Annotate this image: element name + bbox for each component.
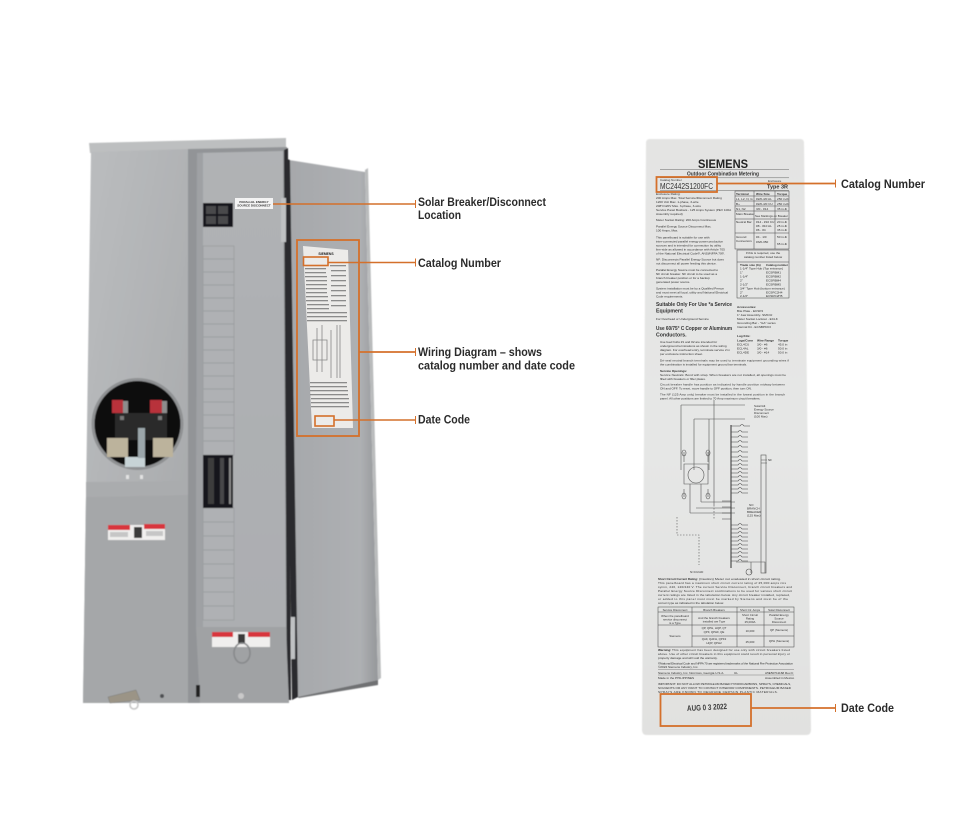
ratings text column: and must meet all local, utility and National Electrical — [656, 290, 728, 294]
label: solar breaker location: Solar Breaker/Disconnect — [418, 197, 546, 209]
footer: UL — [734, 671, 738, 675]
spec table text: L1, L2, N, G — [736, 197, 753, 201]
lower meter cover — [83, 495, 188, 703]
accessories: Torque — [778, 338, 789, 342]
socket cover dots — [126, 475, 143, 479]
breaker catalog text: 2" — [740, 290, 743, 294]
product line: Outdoor Combination Metering — [687, 172, 759, 178]
label: catalog number: Catalog Number — [418, 258, 501, 270]
breaker section inner panel — [196, 151, 286, 627]
breaker catalog text: ECSRC2H5 — [766, 294, 783, 298]
short circuit table text: Rating — [746, 616, 755, 620]
spec table text: 25 in-lb — [777, 224, 787, 228]
spec table text: #2/0-4/0 CU — [756, 202, 773, 206]
footer: A5E50711168 Rev.C — [765, 671, 794, 675]
general notes: filled with breakers or filler plates. — [660, 377, 706, 381]
warning label: meter section — [108, 524, 165, 540]
short circuit rating text: current ratings are listed in the tabulation below. Any circuit breaker installed, replaced, — [658, 593, 790, 597]
general notes: ON and OFF. To reset, move handle to OFF position, then turn ON. — [660, 386, 752, 390]
breaker catalog text: 1-1/4" — [740, 274, 748, 278]
accessories: 3/0 - #14 — [757, 350, 769, 354]
callout: catalog number box — [304, 257, 416, 266]
accessories: 1" Jaw Assembly- SMC3J — [737, 313, 773, 317]
footer: SOLVENTS OR ANY PAINT TO CONTACT INTERIOR COMPONENTS. PETROLEUM BASED — [658, 686, 792, 690]
accessories: Wire Range — [757, 338, 774, 342]
warning text: ©2022 Siemens Industry, Inc. — [658, 665, 699, 669]
ratings text column: Meter Socket Rating: 200 Amps Continuous — [656, 218, 716, 222]
short circuit table text: Solar Disconnect — [768, 608, 790, 612]
ratings text column: 1200 Volt Max. 1-phase, 3-wire — [656, 200, 699, 204]
short circuit rating text: symm, 240, 120/240 V. The current Service Disconnect, branch circuit breakers and — [658, 585, 792, 589]
footer: Siemens Industry, Inc. Norcross, Georgia U.S.A. — [658, 671, 724, 675]
top cap — [89, 138, 286, 153]
short circuit table text: Short Cir. Amps — [740, 608, 761, 612]
schematic annotations: N=CU/AD — [690, 570, 704, 574]
enlarged wiring diagram label — [642, 139, 836, 735]
ratings text column: inter-connected parallel energy power production — [656, 240, 723, 244]
short circuit table text: Service Disconnect — [663, 608, 688, 612]
accessories: Bite Plate - ECSP4 — [737, 309, 763, 313]
warning text: property damage and will void the warranty. — [658, 656, 718, 660]
spec table text: 3/0 - #14 — [756, 207, 768, 211]
warning text: ®National Electrical Code and NFPA 70 are registered trademarks of the National Fire Protection Association — [658, 662, 793, 666]
short circuit table text: installed are Type — [703, 620, 726, 624]
rules — [660, 170, 789, 190]
conductors heading — [656, 326, 732, 338]
schematic annotations: NF — [768, 458, 772, 462]
accessories: 3/0 - #6 — [757, 346, 768, 350]
short circuit table text: Siemens — [669, 634, 681, 638]
footer: IMPORTANT: DO NOT ALLOW PETROLEUM BASED HYDROCARBONS, SPRAYS, CHEMICALS, — [658, 682, 791, 686]
schematic annotations: BREAKER — [747, 510, 762, 514]
breaker catalog text — [740, 251, 789, 298]
enclosure type: Enclosure — [768, 179, 782, 183]
ratings text column: Code requirements. — [656, 294, 683, 298]
meter section cover — [83, 149, 188, 703]
general notes: Service Openings: — [660, 369, 687, 373]
ratings text column: NF circuit breaker. NF circuit to be used as a — [656, 272, 717, 276]
label: solar breaker location — [418, 197, 546, 222]
warning text: This equipment has been designed for use only with circuit breakers listed — [672, 648, 790, 652]
short circuit table text: 10,000 — [746, 629, 755, 633]
ratings text column: sources and is intended for connection by utility — [656, 244, 721, 248]
solar breaker sticker: PARALLEL ENERGY — [239, 200, 269, 204]
accessories: 45.0 in — [778, 342, 788, 346]
label: wiring diagram: catalog number and date code — [418, 360, 575, 372]
accessories: Internal Kit - ECSBPKK3 — [737, 325, 771, 329]
callout boxes and leaders: photo — [273, 200, 416, 436]
breaker catalog text: 1-1/4" Type Hub (Top entrance) — [740, 266, 783, 270]
label: date code right: Date Code — [841, 703, 894, 715]
ratings text column: Parallel Energy Source Disconnect Max. — [656, 224, 712, 228]
breaker catalog text: ECSRC2H4 — [766, 290, 783, 294]
spec table text: Ground — [736, 235, 747, 239]
schematic annotations: NO — [749, 503, 754, 507]
brand: SIEMENS — [698, 159, 748, 171]
schematic annotations: (100 Max) — [754, 414, 768, 418]
conductors heading: Conductors. — [656, 332, 687, 338]
spec table text: Wire Size — [756, 192, 770, 196]
branch breakers — [203, 455, 233, 508]
short circuit table text: Disconnect — [772, 620, 786, 624]
spec table text: Torque — [777, 192, 788, 196]
right spec table — [735, 191, 789, 249]
breaker catalog text: 2-1/2" — [740, 282, 748, 286]
short circuit table text: Parallel Energy — [769, 613, 789, 617]
meter socket ring — [92, 378, 184, 470]
label: wiring diagram — [418, 347, 575, 372]
spec table text: 250 in-lb — [777, 202, 789, 206]
ratings text column: not disconnect all power feeding this device. — [656, 262, 717, 266]
spec table text: #6 - #4 — [756, 228, 766, 232]
wiring diagram on door — [303, 246, 353, 428]
solar breaker sticker: SOURCE DISCONNECT — [237, 204, 271, 208]
ratings text column: 200 Amps Max. Total Service/Disconnect Rating — [656, 196, 722, 200]
breaker catalog text: Trade size (In) — [740, 263, 761, 267]
schematic annotations: Disconnect — [754, 411, 769, 415]
breaker catalog text: 1" — [740, 270, 743, 274]
schematic annotations: BRANCH — [747, 506, 760, 510]
spec table text: #2/0-4/0 AL — [756, 197, 772, 201]
accessories: Meter Socket Lockout - ECLK — [737, 317, 779, 321]
ratings text column: line-side as allowed in accordance with Article 705 — [656, 248, 725, 252]
short circuit table text: Source — [774, 616, 784, 620]
spec table text: N1, N2 — [736, 207, 746, 211]
schematic annotations: (125 Max) — [747, 514, 761, 518]
callout: wiring diagram box — [297, 240, 416, 436]
ratings text column: 208Y/120V Max. 3-phase, 3-wire — [656, 204, 701, 208]
spec table text: #14 - #10 CU — [756, 220, 774, 224]
catalog number value: Catalog Number — [660, 178, 682, 182]
accessories: ECL4CU — [737, 342, 749, 346]
label text content — [656, 159, 795, 713]
short circuit rating text: Parallel Energy Source Disconnect combinations to be used for various short circuit — [658, 589, 792, 593]
spec table text: 35 in-lb — [777, 207, 787, 211]
short circuit rating text: (Caution) Meter not evaluated in short circuit rating. — [699, 577, 781, 581]
general notes: per enclosure instruction sheet. — [660, 352, 703, 356]
ratings text column: of the National Electrical Code®, ANSI/NFPA 70®. — [656, 252, 725, 256]
accessories: ECL4AL — [737, 346, 749, 350]
label: solar breaker location: Location — [418, 210, 461, 222]
spec table text: B+ — [736, 202, 740, 206]
accessories: Accessories: — [737, 305, 756, 309]
general notes: Circuit breaker handle has position as indicated by handle position midway between — [660, 382, 785, 386]
ratings text column: Service Panel Busbars - 125 Amps System (PEV 100A — [656, 208, 732, 212]
solar breaker sticker — [235, 198, 273, 209]
callout: date code box — [315, 416, 416, 426]
label: catalog number right: Catalog Number — [841, 179, 925, 191]
ratings text column: System installation must be by a Qualified Person — [656, 286, 724, 290]
accessories: Grounding Bar - "GA" series — [737, 321, 776, 325]
short circuit table text: Branch Breakers — [703, 608, 725, 612]
short circuit rating text: This panelboard has a maximum short circuit current rating of 25,000 amps rms — [658, 581, 786, 585]
breaker catalog text: 2-1/2" — [740, 294, 748, 298]
spec table text: See Markings on Breaker — [755, 214, 788, 218]
schematic annotations: Solar/Alt — [754, 404, 766, 408]
warning label: breaker section — [212, 632, 270, 647]
photo: open meter panel — [83, 138, 381, 709]
conductors heading: Use 60/75° C Copper or Aluminum — [656, 326, 732, 332]
breaker catalog text: If this is required, use the — [746, 251, 781, 255]
general notes: the combination is installed for equipment ground bar terminals. — [660, 362, 747, 366]
open door — [289, 160, 378, 697]
spec table text: #3/0-350 — [756, 240, 768, 244]
schematic annotations — [690, 404, 774, 574]
breaker catalog text: 3/4" Type Hub (bottom entrance) — [740, 286, 785, 290]
label: date code: Date Code — [418, 414, 470, 426]
solar breaker — [203, 203, 233, 227]
knockout strips — [203, 246, 234, 620]
general notes: panel. All other positions are limited to 70 Amp maximum circuit breakers. — [660, 396, 761, 400]
spec table text: 250 in-lb — [777, 197, 789, 201]
accessories — [737, 305, 789, 354]
ratings text column: Parallel Energy Source must be connected to — [656, 268, 718, 272]
short circuit table text: HQP, QPH2 — [706, 641, 722, 645]
callout: solar breaker leader — [273, 200, 416, 208]
breaker catalog text: Catalog number — [766, 263, 789, 267]
latch — [108, 690, 164, 709]
label: wiring diagram: Wiring Diagram – shows — [418, 347, 542, 359]
short circuit rating text: correct type as indicated in the tabulation below. — [658, 601, 724, 605]
spec table text — [736, 192, 789, 246]
spec table text: #8 - #10 AL — [756, 224, 772, 228]
accessories: Lug Kits: — [737, 334, 750, 338]
short circuit table text — [661, 608, 790, 645]
accessories: 50.0 in — [778, 350, 788, 354]
short circuit table text: QPH (Siemens) — [769, 639, 789, 643]
short circuit table — [658, 607, 794, 647]
callout: date code — [660, 694, 836, 726]
spec table text: Neutral Bar — [736, 220, 752, 224]
spec table text: 50 in-lb — [777, 235, 787, 239]
service equipment heading — [656, 302, 732, 314]
breaker catalog text: ECSRBM5 — [766, 282, 781, 286]
short circuit table text: 25,000A — [745, 620, 755, 624]
breaker catalog text: ECSRBM1 — [766, 270, 781, 274]
enclosure type — [767, 179, 788, 190]
general notes — [660, 340, 789, 400]
accessories: ECL4DE — [737, 350, 749, 354]
footer — [658, 670, 795, 694]
warning text: above. Use of other circuit breakers in this equipment could result in personal injury or — [658, 652, 790, 656]
door hinges — [281, 198, 295, 659]
catalog number value: MC2442S1200FC — [660, 182, 713, 191]
short circuit table text: When the panelboard — [661, 614, 689, 618]
short circuit table text: QP, QPH, HQP, QT — [702, 626, 727, 630]
callout: catalog number — [656, 177, 836, 192]
general notes: Dri-seal neutral branch terminals may be used to terminate equipment grounding wires if — [660, 358, 789, 362]
ratings text column: generated power source. — [656, 280, 690, 284]
short circuit table text: 25,000 — [746, 640, 755, 644]
schematic branch circuits — [722, 424, 750, 561]
short circuit table text: QP (Siemens) — [770, 628, 788, 632]
general notes: The NF (125 Amp only) breaker must be installed in the lowest position in the branch — [660, 392, 785, 396]
schematic diagram — [677, 400, 767, 575]
service equipment heading: Equipment — [656, 308, 683, 314]
short circuit table text: Short Circuit — [742, 613, 758, 617]
spec table text: #4 - 1/0 — [756, 235, 767, 239]
general notes: diagram. For overhead entry, terminate service 2 in — [660, 348, 730, 352]
accessories: Lugs/Conn — [737, 338, 753, 342]
footer: Assembled in Mexico — [765, 676, 795, 680]
general notes: Use feed hubs #1 and #2 are intended for — [660, 340, 717, 344]
ratings text column: This panelboard is suitable for use with — [656, 236, 710, 240]
short circuit table text: QPF, QPHF, QE — [704, 630, 724, 634]
short circuit table text: service disconnect — [663, 618, 687, 622]
ratings text column — [656, 192, 732, 298]
short circuit rating text: Short Circuit Current Rating: — [658, 577, 698, 581]
padlock ring and screw — [196, 643, 250, 699]
meter section band — [86, 481, 188, 497]
spec table text: Connectors — [736, 239, 752, 243]
accessories: 50.0 in — [778, 346, 788, 350]
breaker catalog text: ECSRBM4 — [766, 278, 781, 282]
short circuit rating text: or added to this panel must must be marked by Siemens and must be of the — [658, 597, 788, 601]
enclosure type: Type 3R — [767, 184, 788, 190]
service equipment heading: Suitable Only For Use *a Service — [656, 302, 732, 308]
breaker catalog text: 2" — [740, 278, 743, 282]
lower breaker cover — [196, 627, 289, 703]
short circuit table text: And the branch breakers — [698, 616, 730, 620]
wiring diagram on door: SIEMENS — [318, 252, 334, 256]
ratings text column: NF: Disconnects Parallel Energy Source but does — [656, 258, 724, 262]
breaker section frame — [188, 147, 289, 703]
short circuit table text: QAF, QAFH, QPF2 — [702, 637, 727, 641]
spec table text: Terminal — [736, 192, 749, 196]
footer: Made in the PHILIPPINES — [658, 676, 694, 680]
accessories: 3/0 - #6 — [757, 342, 768, 346]
ratings text column: 100 Amps, Max. — [656, 228, 678, 232]
service note: For Overhead or Underground Service — [656, 317, 709, 321]
warning text: Warning: — [658, 648, 671, 652]
ratings text column: Enclosure Rating: — [656, 192, 681, 196]
schematic annotations: Energy Source — [754, 408, 774, 412]
warning text — [658, 648, 793, 669]
label sheet — [642, 139, 811, 735]
catalog number value — [660, 178, 713, 191]
short circuit rating text — [658, 577, 792, 605]
spec table text: 20 in-lb — [777, 220, 787, 224]
footer: SPRAYS ARE KNOWN TO DEGRADE CERTAIN PLASTIC MATERIALS. — [658, 690, 778, 694]
ratings text column: branch breaker position or for a backup — [656, 276, 710, 280]
general notes: underground terminations as shown in the wiring — [660, 344, 727, 348]
breaker catalog text: ECSRBM2 — [766, 274, 781, 278]
general notes: Service Neutrals: Bond with strap. When breakers are not installed, all openings must be — [660, 373, 786, 377]
spec table text: 35 in-lb — [777, 228, 787, 232]
spec table text: 65 in-lb — [777, 242, 787, 246]
breaker catalog text: catalog number listed below — [744, 255, 783, 259]
short circuit table text: is a Type — [669, 621, 681, 625]
spec table text: Main Breaker — [736, 212, 754, 216]
date stamp: AUG 0 3 2022 — [687, 702, 728, 713]
breaker catalog box — [737, 250, 789, 298]
ratings text column: Assembly required) — [656, 212, 683, 216]
